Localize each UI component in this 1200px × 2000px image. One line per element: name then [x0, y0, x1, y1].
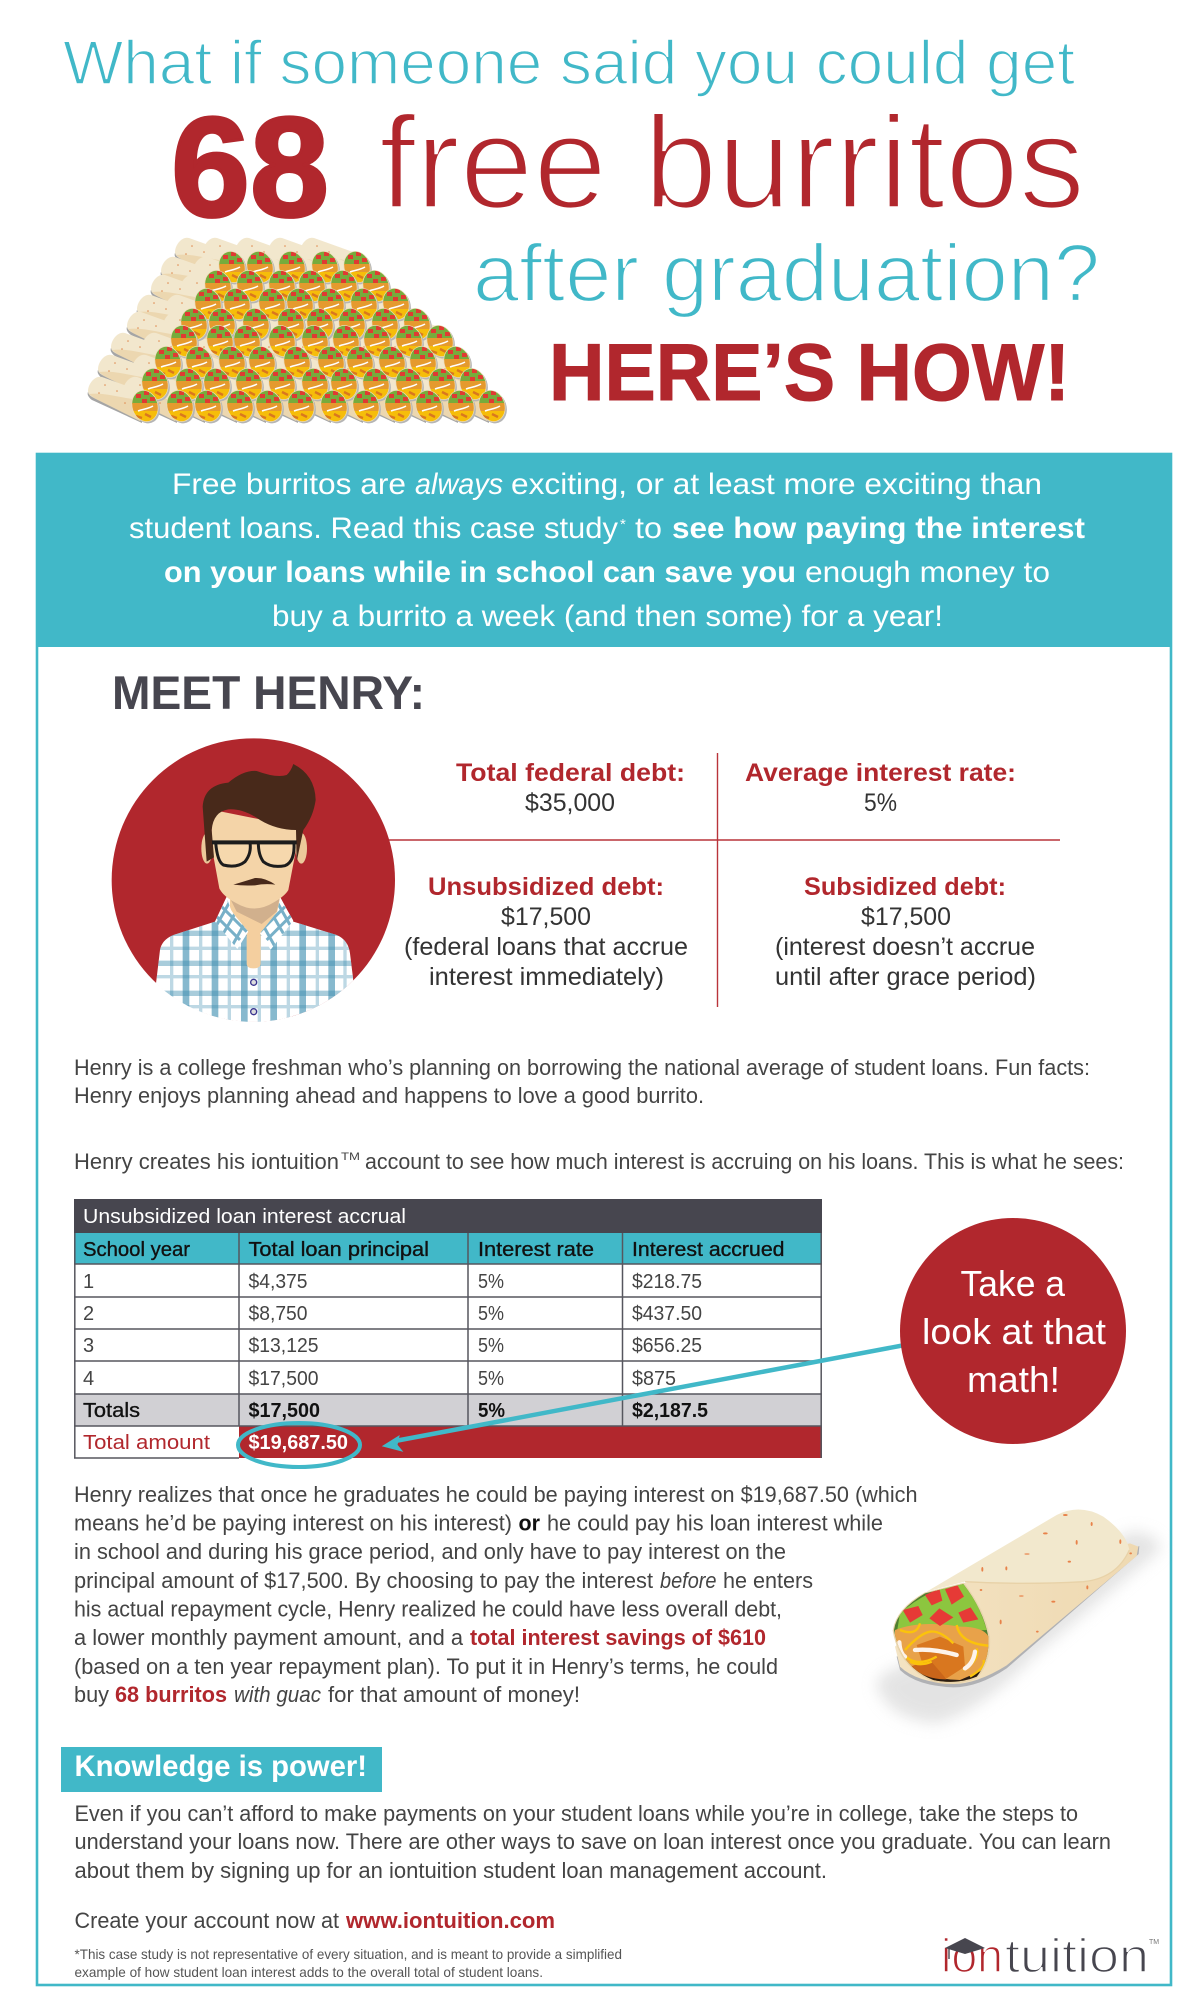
- logo: iontuition: TM: [1149, 1939, 1159, 1946]
- callout: take a look at that math: [900, 1218, 1126, 1444]
- text block: Henry introduction: Henry enjoys planning ahead and happens to love a good burrito.: [74, 1083, 704, 1108]
- arrow from callout to total: [383, 1345, 905, 1451]
- table: unsubsidized loan interest accrual: 4: [83, 1368, 94, 1390]
- text block: Henry introduction: [74, 1055, 1124, 1174]
- stat: subsidized debt: Subsidized debt:: [804, 873, 1006, 901]
- footnote: *This case study is not representative of every situation, and is meant to provide a simplified: [74, 1946, 622, 1962]
- table: unsubsidized loan interest accrual: $17,500: [248, 1368, 318, 1390]
- table: unsubsidized loan interest accrual: $19,687.50: [248, 1432, 348, 1454]
- text block: knowledge paragraph: [74, 1801, 1111, 1933]
- number 68: 68: [171, 88, 329, 247]
- panel: knowledge is power: [61, 1747, 382, 1792]
- neck and placket: [230, 897, 280, 968]
- table: unsubsidized loan interest accrual: Unsubsidized loan interest accrual: [83, 1206, 406, 1228]
- table: unsubsidized loan interest accrual: 5%: [478, 1368, 504, 1390]
- table: unsubsidized loan interest accrual: 1: [83, 1271, 94, 1293]
- text block: knowledge paragraph: about them by signing up for an iontuition student loan management account.: [74, 1858, 827, 1883]
- table: unsubsidized loan interest accrual: 5%: [478, 1303, 504, 1325]
- title: [63, 29, 1100, 418]
- stat: subsidized debt: [775, 873, 1036, 991]
- table: unsubsidized loan interest accrual: 2: [83, 1303, 94, 1325]
- text block: savings explanation: he could pay his loan interest while: [547, 1510, 883, 1536]
- text block: savings explanation: (based on a ten year repayment plan). To put it in Henry’s terms, he could: [74, 1654, 778, 1679]
- text block: savings explanation: principal amount of $17,500. By choosing to pay the interest: [74, 1568, 653, 1593]
- title line 1: What if someone said you could get: [63, 29, 1075, 98]
- logo: iontuition: [941, 1929, 1159, 1982]
- totals row background: [74, 1394, 822, 1426]
- callout: take a look at that math: Take a: [960, 1263, 1066, 1304]
- text block: savings explanation: a lower monthly payment amount, and a: [74, 1625, 464, 1650]
- stat: average interest rate: 5%: [864, 789, 897, 817]
- text block: savings explanation: 68 burritos: [115, 1682, 227, 1707]
- icon: Henry portrait: [112, 738, 395, 1027]
- stat: unsubsidized debt: interest immediately): [429, 963, 664, 991]
- stat: unsubsidized debt: (federal loans that accrue: [404, 933, 688, 961]
- mustache: [233, 878, 275, 886]
- text block: knowledge paragraph: understand your loans now. There are other ways to save on loan interest once you graduate. You can learn: [74, 1829, 1111, 1854]
- text block: savings explanation: in school and during his grace period, and only have to pay interest on the: [74, 1539, 786, 1564]
- panel: intro banner: [36, 453, 1172, 647]
- glasses: [212, 842, 297, 866]
- panel: intro banner: *: [620, 516, 626, 533]
- stat: total federal debt: [456, 759, 685, 817]
- stat: total federal debt: Total federal debt:: [456, 759, 685, 787]
- stat: subsidized debt: (interest doesn’t accrue: [775, 933, 1035, 961]
- buttons: [251, 979, 257, 985]
- logo: iontuition: ion: [941, 1929, 1003, 1982]
- text block: knowledge paragraph: www.iontuition.com: [345, 1908, 555, 1933]
- table: unsubsidized loan interest accrual: $875: [632, 1368, 676, 1390]
- text block: Henry introduction: account to see how much interest is accruing on his loans. This is what he sees:: [365, 1149, 1124, 1174]
- stats dividers: [389, 753, 1060, 1007]
- stat: subsidized debt: until after grace period): [775, 963, 1036, 991]
- table: unsubsidized loan interest accrual: $8,750: [248, 1303, 308, 1325]
- text block: savings explanation: with guac: [234, 1682, 321, 1707]
- outer content frame: [37, 454, 1171, 1985]
- table: unsubsidized loan interest accrual: Interest accrued: [632, 1239, 784, 1261]
- stat: unsubsidized debt: $17,500: [501, 903, 591, 931]
- table: unsubsidized loan interest accrual: Interest rate: [478, 1239, 594, 1261]
- panel: intro banner: Free burritos are: [172, 468, 406, 501]
- stat: unsubsidized debt: Unsubsidized debt:: [428, 873, 664, 901]
- text block: savings explanation: [74, 1482, 918, 1707]
- panel: intro banner: student loans. Read this case study: [129, 512, 618, 545]
- text block: savings explanation: buy: [74, 1682, 109, 1707]
- panel: intro banner: on your loans while in school can save you: [164, 556, 796, 589]
- text block: savings explanation: his actual repayment cycle, Henry realized he could have less overall debt,: [74, 1596, 782, 1622]
- callout: take a look at that math: math!: [967, 1359, 1060, 1400]
- panel: intro banner: buy a burrito a week (and then some) for a year!: [272, 600, 943, 633]
- text block: knowledge paragraph: Even if you can’t afford to make payments on your student loans while you’re in college, take the steps to: [74, 1801, 1078, 1826]
- text block: Henry introduction: TM: [341, 1151, 360, 1163]
- heading: meet Henry: MEET HENRY:: [112, 666, 425, 719]
- table: unsubsidized loan interest accrual: 5%: [478, 1335, 504, 1357]
- table header row: [74, 1233, 822, 1264]
- total amount bar: [239, 1426, 822, 1458]
- stat: total federal debt: $35,000: [525, 789, 615, 817]
- table: unsubsidized loan interest accrual: Total amount: [83, 1432, 210, 1454]
- collar: [215, 900, 248, 949]
- icon: burrito: [877, 1510, 1160, 1723]
- panel: knowledge is power: Knowledge is power!: [74, 1750, 367, 1783]
- title line 4: HERE’S HOW!: [549, 328, 1070, 418]
- text block: savings explanation: total interest savings of $610: [470, 1625, 766, 1650]
- panel: intro banner: see how paying the interest: [672, 512, 1085, 545]
- text block: savings explanation: for that amount of money!: [328, 1682, 580, 1707]
- table: unsubsidized loan interest accrual: Totals: [83, 1400, 140, 1422]
- footnote: [74, 1946, 622, 1980]
- text block: savings explanation: means he’d be paying interest on his interest): [74, 1510, 512, 1536]
- panel: intro banner: to: [635, 512, 662, 545]
- table: unsubsidized loan interest accrual: $17,500: [248, 1400, 320, 1422]
- table: unsubsidized loan interest accrual: 5%: [478, 1271, 504, 1293]
- panel: intro banner: enough money to: [805, 556, 1050, 589]
- table: unsubsidized loan interest accrual: $2,187.5: [632, 1400, 708, 1422]
- text block: Henry introduction: Henry is a college freshman who’s planning on borrowing the national average of student loans. Fun facts:: [74, 1055, 1090, 1080]
- table: unsubsidized loan interest accrual: 3: [83, 1335, 94, 1357]
- text block: savings explanation: or: [518, 1510, 540, 1536]
- table: unsubsidized loan interest accrual: Total loan principal: [248, 1239, 429, 1261]
- table: unsubsidized loan interest accrual: $4,375: [248, 1271, 308, 1293]
- text block: savings explanation: Henry realizes that once he graduates he could be paying interest on $19,687.50 (which: [74, 1482, 918, 1507]
- title line 2: free burritos: [379, 89, 1085, 236]
- table: unsubsidized loan interest accrual: $13,125: [248, 1335, 318, 1357]
- panel: intro banner: always: [415, 468, 503, 501]
- text block: savings explanation: he enters: [723, 1568, 813, 1593]
- table: unsubsidized loan interest accrual: 5%: [478, 1400, 505, 1422]
- table title bar: [74, 1199, 822, 1233]
- face: [212, 810, 297, 909]
- hair: [203, 764, 316, 862]
- stat: subsidized debt: $17,500: [861, 903, 951, 931]
- table: unsubsidized loan interest accrual: $437.50: [632, 1303, 702, 1325]
- table: unsubsidized loan interest accrual: [74, 1199, 822, 1458]
- ears: [201, 833, 213, 864]
- callout: take a look at that math: look at that: [922, 1311, 1106, 1352]
- icon: highlight ellipse around total: [238, 1423, 360, 1467]
- panel: intro banner: exciting, or at least more exciting than: [511, 468, 1042, 501]
- stat: average interest rate: Average interest rate:: [745, 759, 1016, 787]
- text block: knowledge paragraph: Create your account now at: [74, 1908, 339, 1933]
- table: unsubsidized loan interest accrual: $218.75: [632, 1271, 702, 1293]
- stat: unsubsidized debt: [404, 873, 688, 991]
- text block: Henry introduction: Henry creates his iontuition: [74, 1149, 339, 1174]
- table: unsubsidized loan interest accrual: School year: [83, 1239, 190, 1261]
- footnote: example of how student loan interest adds to the overall total of student loans.: [74, 1964, 543, 1980]
- panel: debt stats: [404, 759, 1036, 991]
- shirt: [153, 893, 357, 1027]
- logo: iontuition: tuition: [1005, 1929, 1149, 1982]
- stat: average interest rate: [745, 759, 1016, 817]
- table: unsubsidized loan interest accrual: $656.25: [632, 1335, 702, 1357]
- burrito pile illustration: [88, 238, 511, 427]
- title line 3: after graduation?: [473, 228, 1100, 319]
- text block: savings explanation: before: [660, 1568, 716, 1593]
